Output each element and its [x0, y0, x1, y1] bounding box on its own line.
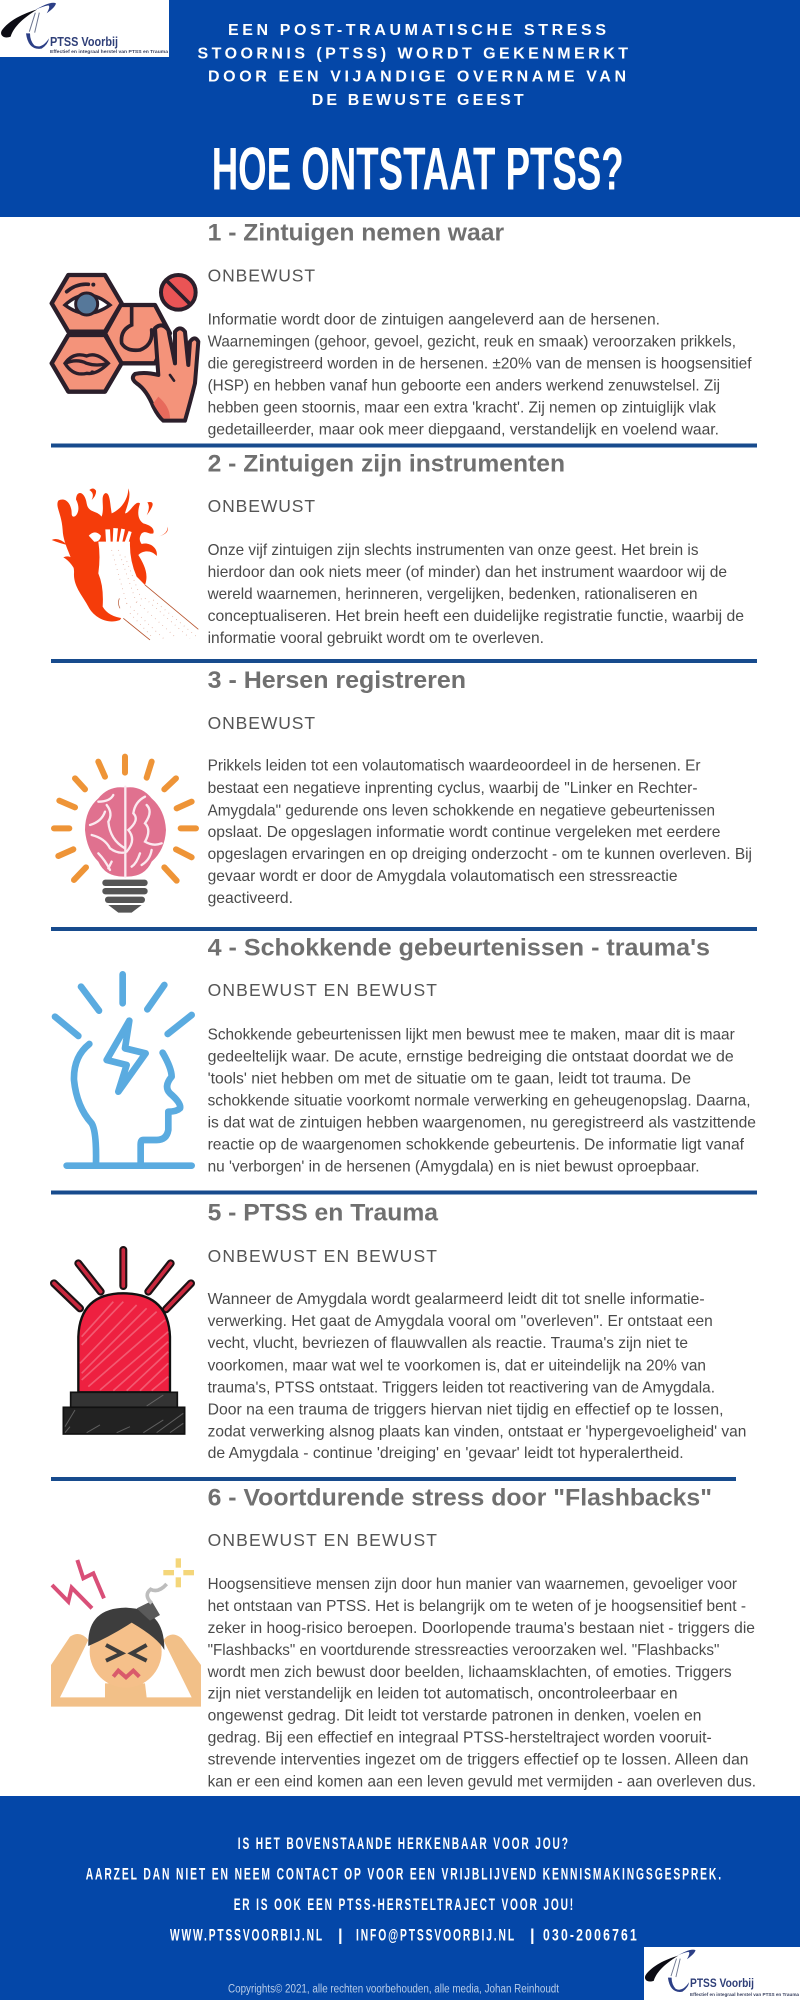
body text: Wanneer de Amygdala wordt gealarmeerd leidt dit tot snelle informatie- [208, 1291, 705, 1308]
logo: PTSS Voorbij bottom [644, 1947, 800, 2000]
contact details: 030-2006761 [543, 1927, 639, 1945]
body text: Door na een trauma de triggers hiervan niet tijdig en effectief op te lossen, [208, 1401, 724, 1418]
contact details: INFO@PTSSVOORBIJ.NL [356, 1927, 516, 1945]
icon: senses with hand [52, 275, 198, 421]
heading: 5 - PTSS en Trauma [208, 1200, 438, 1227]
body text: trauma's, PTSS ontstaat. Triggers leiden tot reactivering van de Amygdala. [208, 1380, 715, 1396]
heading: 4 - Schokkende gebeurtenissen - trauma's [208, 935, 710, 962]
contact details: | [530, 1927, 538, 1945]
body text: "Flashbacks" en voortdurende stressreacties veroorzaken wel. "Flashbacks" [208, 1642, 719, 1659]
body text: wereld waarnemen, herinneren, vergelijken, bedenken, rationaliseren en [207, 586, 698, 603]
body text: gevaar wordt er door de Amygdala volautomatisch een stressreactie [208, 868, 678, 885]
body text: gedrag. Bij een effectief en integraal PTSS-hersteltraject worden vooruit- [208, 1730, 712, 1747]
logo: PTSS Voorbij top: PTSS Voorbij [50, 35, 118, 49]
logo: PTSS Voorbij top [0, 0, 169, 57]
contact details: | [338, 1927, 346, 1945]
body text: gedeeltelijk waar. De acute, ernstige bedreiging die ontstaat doordat we de [208, 1048, 734, 1065]
body text: zeker in hoog-risico beroepen. Doorlopende trauma's bestaan niet - triggers die [208, 1620, 755, 1637]
body text: opslaat. De opgeslagen informatie wordt continue vergeleken met eerdere [208, 824, 720, 841]
panel: header [0, 0, 800, 217]
body text: de Amygdala - continue 'dreiging' en 'gevaar' leidt tot hyperalertheid. [208, 1445, 684, 1462]
body text: Schokkende gebeurtenissen lijkt men bewust mee te maken, maar dit is maar [208, 1026, 735, 1043]
panel: footer [0, 1796, 800, 2000]
body text [208, 1026, 756, 1175]
subheading: ONBEWUST [208, 496, 315, 516]
contact details: WWW.PTSSVOORBIJ.NL [170, 1927, 324, 1945]
subheading: ONBEWUST [208, 713, 315, 733]
call to action text [86, 1835, 723, 1914]
body text [207, 542, 744, 647]
heading: 3 - Hersen registreren [208, 667, 466, 694]
body text [208, 1291, 746, 1462]
body text: wordt men zich bewust door beelden, lichaamsklachten, of emoties. Triggers [207, 1664, 732, 1681]
body text [207, 1576, 756, 1791]
call to action text: IS HET BOVENSTAANDE HERKENBAAR VOOR JOU? [238, 1835, 570, 1853]
body text: opgeslagen ervaringen en op dreiging onderzocht - om te kunnen overleven. Bij [208, 846, 752, 863]
body text: informatie vooral gebruikt wordt om te overleven. [208, 630, 544, 647]
header intro text: DOOR EEN VIJANDIGE OVERNAME VAN [208, 68, 626, 85]
body text: gedetailleerder, maar ook meer diepgaand, verstandelijk en voelend waar. [208, 422, 719, 438]
logo: PTSS Voorbij bottom: Effectief en integraal herstel van PTSS en Trauma [690, 1992, 800, 1997]
body text: ongewenst gedrag. Dit leidt tot verstarde patronen in denken, voelen en [208, 1708, 702, 1725]
header intro text: STOORNIS (PTSS) WORDT GEKENMERKT [198, 45, 628, 62]
body text: Onze vijf zintuigen zijn slechts instrumenten van onze geest. Het brein is [208, 542, 699, 559]
header intro text: DE BEWUSTE GEEST [312, 92, 524, 109]
body text: Informatie wordt door de zintuigen aangeleverd aan de hersenen. [208, 312, 660, 328]
logo: PTSS Voorbij bottom: PTSS Voorbij [690, 1978, 754, 1990]
heading: 1 - Zintuigen nemen waar [208, 220, 505, 246]
subheading: ONBEWUST EN BEWUST [208, 1246, 437, 1266]
body text: hebben geen stoornis, maar een extra 'kracht'. Zij nemen op zintuiglijk vlak [208, 400, 716, 416]
panel: step 5 [54, 1200, 746, 1462]
body text: vecht, vlucht, bevriezen of flauwvallen als reactie. Trauma's zijn niet te [208, 1335, 688, 1352]
body text: conceptualiseren. Het brein heeft een duidelijke registratie functie, waarbij de [208, 608, 744, 625]
heading: 6 - Voortdurende stress door "Flashbacks" [208, 1484, 712, 1512]
body text: Prikkels leiden tot een volautomatisch waardeoordeel in de hersenen. Er [208, 758, 700, 775]
body text: geactiveerd. [208, 890, 293, 907]
body text [208, 312, 752, 438]
body text: schokkende situatie voorkomt normale verwerking en geheugenopslag. Daarna, [208, 1092, 751, 1109]
body text: zodat verwerking alsnog plaats kan vinden, ontstaat er 'hypergevoeligheid' van [208, 1423, 746, 1440]
body text: nu 'verborgen' in de hersenen (Amygdala) en is niet bewust oproepbaar. [208, 1158, 700, 1175]
body text: (HSP) en hebben vanaf hun geboorte een anders werkend zenuwstelsel. Zij [208, 378, 720, 394]
body text: kan er een eind komen aan een leven gevuld met vermijden - aan overleven dus. [208, 1774, 756, 1791]
call to action text: ER IS OOK EEN PTSS-HERSTELTRAJECT VOOR JOU! [234, 1896, 575, 1914]
body text: het ontstaan van PTSS. Het is belangrijk om te weten of je hoogsensitief bent - [208, 1598, 746, 1615]
subheading: ONBEWUST [208, 266, 315, 286]
panel: step 1 [52, 220, 752, 438]
header intro text: EEN POST-TRAUMATISCHE STRESS [228, 22, 606, 39]
body text: Hoogsensitieve mensen zijn door hun manier van waarnemen, gevoeliger voor [208, 1576, 737, 1593]
header background [0, 0, 800, 217]
subheading: ONBEWUST EN BEWUST [208, 1530, 437, 1550]
icon: red alarm siren [54, 1250, 191, 1434]
body text: is dat wat de zintuigen hebben waargenomen, nu geregistreerd als vastzittende [208, 1114, 756, 1132]
body text: reactie op de waargenomen schokkende gebeurtenis. De informatie ligt vanaf [208, 1137, 745, 1154]
body text [208, 758, 752, 907]
heading: 2 - Zintuigen zijn instrumenten [208, 451, 565, 478]
body text: 'tools' niet hebben om met de situatie om te gaan, leidt tot trauma. De [208, 1071, 691, 1088]
panel: step 3 [54, 667, 752, 913]
footer background [0, 1796, 800, 2000]
icon: head with lightning bolt [55, 974, 192, 1166]
header intro text [198, 22, 628, 109]
icon: brain light bulb [54, 757, 196, 913]
copyright: Copyrights© 2021, alle rechten voorbehouden, alle media, Johan Reinhoudt [228, 1984, 560, 1996]
body text: hierdoor dan ook niets meer (of minder) dan het instrument waardoor wij de [208, 564, 727, 581]
panel: step 4 [55, 935, 756, 1175]
body text: Waarnemingen (gehoor, gevoel, gezicht, reuk en smaak) veroorzaken prikkels, [208, 334, 736, 350]
panel: step 2 [52, 451, 744, 647]
panel: step 6 [51, 1484, 756, 1791]
body text: die geregistreerd worden in de hersenen. ±20% van de mensen is hoogsensitief [208, 356, 752, 372]
body text: Amygdala" gedurende ons leven schokkende en negatieve gebeurtenissen [208, 802, 715, 819]
logo: PTSS Voorbij top: Effectief en integraal herstel van PTSS en Trauma [50, 49, 168, 54]
icon: stressed person with bomb [51, 1558, 201, 1707]
body text: strevende interventies ingezet om de triggers effectief op te lossen. Alleen dan [208, 1752, 749, 1769]
body text: verwerking. Het gaat de Amygdala vooral om "overleven". Er ontstaat een [208, 1313, 713, 1330]
icon: burning foot [52, 488, 198, 640]
contact details [170, 1927, 639, 1945]
body text: bestaat een negatieve inprenting cyclus, waarbij de "Linker en Rechter- [208, 780, 698, 797]
body text: voorkomen, maar wat wel te voorkomen is, dat er uiteindelijk na 20% van [208, 1357, 706, 1374]
subheading: ONBEWUST EN BEWUST [208, 980, 437, 1000]
body text: zijn niet verstandelijk en leiden tot automatisch, oncontroleerbaar en [208, 1686, 678, 1703]
